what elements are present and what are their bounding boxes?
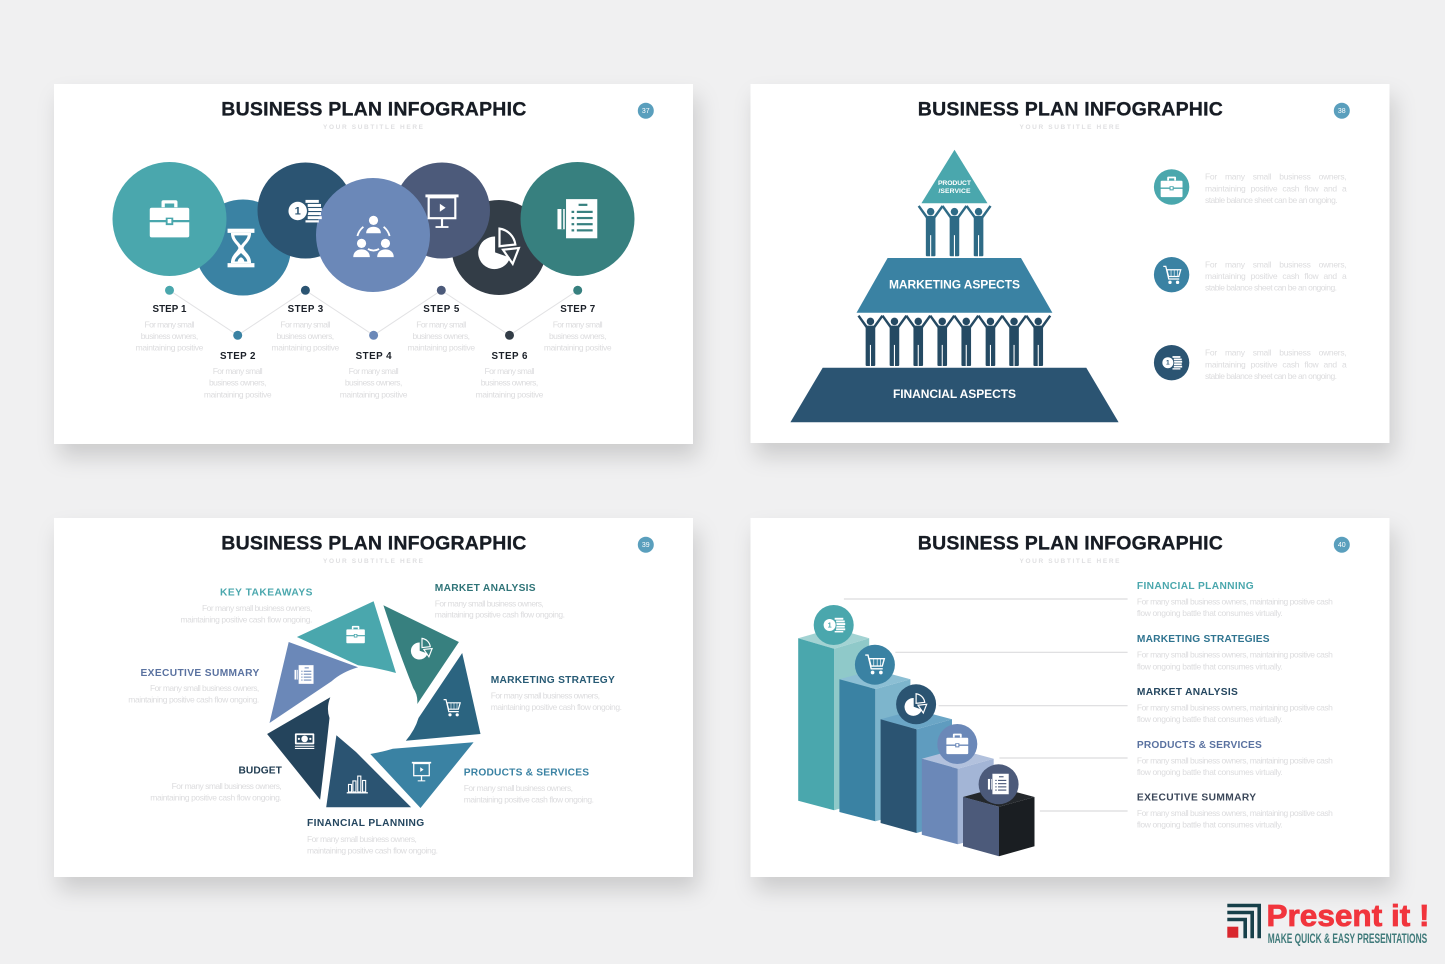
- label: executive summary: flow ongoing battle that consumes virtually.: [1137, 820, 1283, 830]
- label: market analysis: MARKET ANALYSIS: [1137, 687, 1238, 698]
- logo name: Present it !: [1266, 898, 1430, 933]
- label: financial planning: flow ongoing battle that consumes virtually.: [1137, 608, 1283, 618]
- label: key takeaways: For many small business owners,: [202, 603, 312, 613]
- page number badge: 39: [642, 542, 650, 549]
- step 4: business owners,: [345, 378, 402, 388]
- label: executive summary: EXECUTIVE SUMMARY: [1137, 792, 1256, 803]
- segment: products and services: [370, 742, 474, 808]
- page number badge: [1334, 103, 1350, 119]
- title: BUSINESS PLAN INFOGRAPHIC: [918, 99, 1223, 121]
- step 7: STEP 7: [560, 304, 596, 315]
- 3d bar 4: [922, 749, 994, 844]
- label: products and services: [1137, 740, 1333, 777]
- panel: seven segment cycle slide: [54, 518, 693, 877]
- step 1: maintaining positive: [136, 343, 204, 353]
- label: products and services: PRODUCTS & SERVICES: [1137, 740, 1262, 751]
- label: financial planning: FINANCIAL PLANNING: [307, 818, 424, 829]
- label: budget: BUDGET: [238, 765, 283, 776]
- segment: executive summary: [270, 642, 358, 723]
- label: key takeaways: maintaining positive cash flow ongoing.: [180, 615, 312, 625]
- text block three: maintaining positive cash flow and a: [1205, 359, 1347, 369]
- subtitle: YOUR SUBTITLE HERE: [323, 558, 424, 565]
- step 2: STEP 2: [220, 351, 256, 362]
- label: key takeaways: [180, 588, 313, 625]
- icon badge: coins: [814, 605, 854, 645]
- step 5: maintaining positive: [407, 343, 475, 353]
- label: market analysis: [1137, 687, 1333, 724]
- text block one: stable balance sheet can be an ongoing.: [1205, 195, 1338, 205]
- people row: eight figures: [858, 316, 1050, 367]
- pyramid base: financial aspects: [790, 368, 1119, 422]
- label: financial planning: [1137, 581, 1333, 618]
- pyramid middle: marketing aspects: [856, 258, 1052, 313]
- segment: market analysis: [383, 605, 459, 704]
- step 2: [204, 331, 272, 400]
- text block two: [1205, 260, 1347, 293]
- text block two: For many small business owners,: [1205, 260, 1347, 270]
- label: executive summary: [1137, 792, 1333, 830]
- subtitle: YOUR SUBTITLE HERE: [323, 124, 424, 131]
- circle chain with icons: [112, 162, 634, 296]
- label: financial planning: maintaining positive cash flow ongoing.: [307, 846, 438, 856]
- label: marketing strategies: MARKETING STRATEGIES: [1137, 634, 1270, 645]
- step 1: business owners,: [141, 331, 198, 341]
- step 4: For many small: [349, 366, 399, 376]
- icon: pie chart: [478, 229, 519, 269]
- 3d bar 2: [839, 670, 910, 821]
- connector zigzag line: [170, 290, 578, 335]
- icon: briefcase badge: [1154, 169, 1189, 205]
- step 3: business owners,: [277, 331, 334, 341]
- step 6: STEP 6: [492, 351, 528, 362]
- leader lines: [844, 599, 1128, 811]
- label: financial planning: For many small business owners,: [307, 834, 417, 844]
- text block three: [1205, 348, 1347, 381]
- step 7: For many small: [553, 319, 603, 329]
- segment: marketing strategy: [406, 653, 480, 741]
- people row: three figures: [919, 206, 991, 257]
- text block three: stable balance sheet can be an ongoing.: [1205, 371, 1337, 381]
- label: marketing strategy: [491, 675, 622, 712]
- title: BUSINESS PLAN INFOGRAPHIC: [221, 99, 526, 121]
- page number badge: 40: [1338, 542, 1346, 549]
- panel: pyramid slide: [750, 84, 1390, 443]
- step 4: STEP 4: [356, 351, 392, 362]
- icon: document: [557, 198, 598, 239]
- icon badge: briefcase: [937, 724, 977, 764]
- label: products and services: [464, 768, 594, 805]
- step 1: [136, 286, 204, 353]
- pyramid top: product / service: PRODUCT: [938, 180, 972, 187]
- segment: budget: [267, 697, 330, 800]
- step 5: [407, 286, 475, 353]
- label: market analysis: MARKET ANALYSIS: [435, 583, 536, 594]
- step 7: business owners,: [549, 331, 606, 341]
- page number badge: [638, 537, 654, 553]
- icon badge: pie: [896, 684, 936, 724]
- step 3: [272, 286, 340, 353]
- pyramid base: financial aspects: FINANCIAL ASPECTS: [893, 387, 1016, 401]
- text block one: For many small business owners,: [1205, 172, 1347, 182]
- step 2: business owners,: [209, 378, 266, 388]
- icon: briefcase: [150, 200, 189, 237]
- pyramid top: product / service: /SERVICE: [938, 188, 971, 195]
- icon: coins badge: [1154, 345, 1189, 380]
- label: marketing strategies: [1137, 634, 1333, 671]
- step 3: STEP 3: [288, 304, 324, 315]
- step 5: For many small: [416, 319, 466, 329]
- label: products and services: maintaining positive cash flow ongoing.: [464, 795, 594, 805]
- label: executive summary: EXECUTIVE SUMMARY: [140, 668, 260, 679]
- page number badge: 37: [642, 108, 650, 115]
- text block three: For many small business owners,: [1205, 348, 1347, 358]
- label: market analysis: For many small business owners, maintaining positive cash: [1137, 702, 1333, 712]
- step 6: maintaining positive: [476, 390, 544, 400]
- text block one: maintaining positive cash flow and a: [1205, 183, 1347, 193]
- title: BUSINESS PLAN INFOGRAPHIC: [221, 533, 526, 555]
- label: budget: maintaining positive cash flow ongoing.: [150, 792, 282, 802]
- label: market analysis: For many small business owners,: [435, 598, 544, 608]
- icon: coins: [287, 200, 322, 222]
- pyramid top: product / service: [921, 150, 988, 203]
- step 5: STEP 5: [423, 304, 460, 315]
- page number badge: [1334, 537, 1350, 553]
- text block two: stable balance sheet can be an ongoing.: [1205, 283, 1337, 293]
- label: marketing strategies: flow ongoing battle that consumes virtually.: [1137, 661, 1283, 671]
- segment: financial planning: [326, 735, 411, 807]
- text block two: maintaining positive cash flow and a: [1205, 271, 1347, 281]
- label: products and services: For many small business owners, maintaining positive cash: [1137, 755, 1333, 765]
- title: BUSINESS PLAN INFOGRAPHIC: [918, 533, 1223, 555]
- label: market analysis: maintaining positive cash flow ongoing.: [435, 610, 565, 620]
- 3d bar 3: [881, 710, 952, 833]
- label: executive summary: maintaining positive cash flow ongoing.: [128, 695, 259, 705]
- step 6: business owners,: [481, 378, 538, 388]
- logo mark: [1227, 906, 1259, 938]
- label: financial planning: For many small business owners, maintaining positive cash: [1137, 596, 1333, 606]
- label: budget: For many small business owners,: [172, 781, 282, 791]
- label: products and services: PRODUCTS & SERVICES: [464, 767, 589, 778]
- step 1: STEP 1: [152, 304, 187, 315]
- label: marketing strategies: For many small business owners, maintaining positive cash: [1137, 650, 1333, 660]
- subtitle: YOUR SUBTITLE HERE: [1020, 124, 1120, 131]
- label: marketing strategy: MARKETING STRATEGY: [491, 675, 615, 686]
- icon: team: [353, 216, 394, 257]
- label: budget: [150, 766, 283, 802]
- 3d bar 5: [963, 787, 1034, 856]
- step 6: [476, 331, 544, 400]
- label: executive summary: For many small business owners,: [150, 683, 259, 693]
- icon: cart badge: [1154, 257, 1189, 292]
- step 7: maintaining positive: [544, 343, 612, 353]
- step 5: business owners,: [413, 331, 470, 341]
- step 3: For many small: [280, 319, 331, 329]
- label: executive summary: For many small business owners, maintaining positive cash: [1137, 808, 1333, 818]
- 3d bar 1: [798, 628, 869, 810]
- step 2: maintaining positive: [204, 390, 272, 400]
- label: market analysis: flow ongoing battle that consumes virtually.: [1137, 714, 1283, 724]
- step 7: [544, 286, 612, 353]
- panel: staircase slide: [750, 518, 1390, 877]
- label: marketing strategy: maintaining positive cash flow ongoing.: [491, 702, 622, 712]
- label: market analysis: [435, 583, 565, 620]
- label: key takeaways: KEY TAKEAWAYS: [220, 587, 313, 598]
- icon: hourglass: [228, 229, 254, 267]
- icon: presentation board: [425, 194, 459, 228]
- step 6: For many small: [484, 366, 535, 376]
- label: executive summary: [128, 668, 260, 705]
- step 2: For many small: [213, 366, 263, 376]
- page number badge: [638, 103, 654, 119]
- panel: step circles slide: [54, 84, 693, 444]
- step 4: [340, 331, 408, 400]
- step 4: maintaining positive: [340, 390, 408, 400]
- logo: Present it: [1227, 898, 1430, 946]
- text block one: [1205, 172, 1347, 205]
- subtitle: YOUR SUBTITLE HERE: [1020, 558, 1120, 565]
- icon badge: document: [979, 764, 1019, 804]
- label: financial planning: FINANCIAL PLANNING: [1137, 581, 1254, 592]
- step 3: maintaining positive: [272, 343, 340, 353]
- segment: key takeaways: [297, 601, 396, 673]
- pyramid middle: marketing aspects: MARKETING ASPECTS: [889, 278, 1020, 292]
- label: marketing strategy: For many small business owners,: [491, 690, 600, 700]
- icon badge: cart: [855, 645, 895, 685]
- label: products and services: flow ongoing battle that consumes virtually.: [1137, 767, 1283, 777]
- page number badge: 38: [1338, 108, 1346, 115]
- label: products and services: For many small business owners,: [464, 783, 573, 793]
- step 1: For many small: [144, 319, 195, 329]
- label: financial planning: [307, 818, 438, 856]
